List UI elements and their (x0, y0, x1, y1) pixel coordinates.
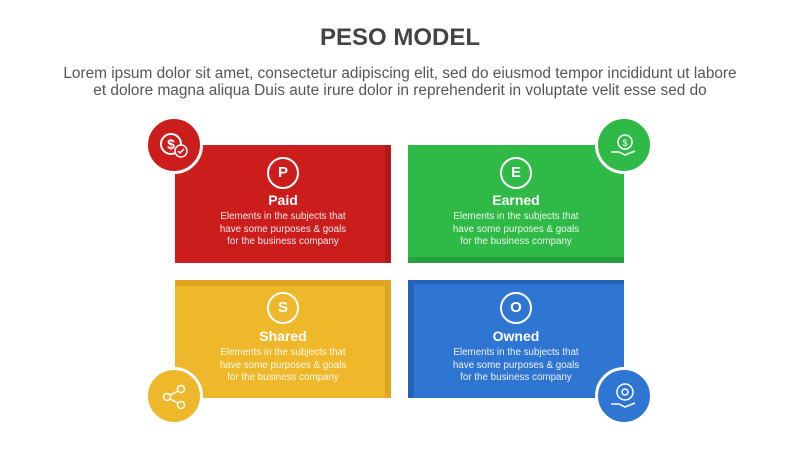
icon: dollar (145, 116, 203, 174)
icon: share (145, 367, 203, 425)
subtitle: et dolore magna aliqua Duis aute irure dolor in reprehenderit in voluptate velit esse sed do (93, 82, 707, 99)
icon: money hand (595, 116, 653, 174)
text paid: for the business company (227, 236, 339, 247)
heading earned: Earned (492, 192, 540, 208)
text shared: for the business company (227, 372, 339, 383)
letter E: E (511, 164, 521, 181)
title: PESO MODEL (320, 24, 480, 51)
text earned (453, 211, 579, 247)
text owned (453, 347, 579, 383)
heading shared: Shared (259, 328, 307, 344)
panel: paid (175, 145, 391, 263)
panel: shared (175, 280, 391, 398)
heading paid: Paid (268, 192, 298, 208)
text shared: have some purposes & goals (220, 360, 346, 370)
letter S (267, 292, 299, 324)
subtitle (63, 65, 737, 99)
icon: gear hand (595, 367, 653, 425)
icon: money hand: $ (622, 138, 628, 148)
letter P: P (278, 164, 288, 181)
text shared: Elements in the subjects that (220, 347, 346, 358)
letter O: O (510, 299, 522, 316)
text earned: Elements in the subjects that (453, 211, 579, 222)
text owned: have some purposes & goals (453, 360, 579, 370)
text paid (220, 211, 346, 247)
letter S: S (278, 299, 288, 316)
text paid: Elements in the subjects that (220, 211, 346, 222)
subtitle: Lorem ipsum dolor sit amet, consectetur adipiscing elit, sed do eiusmod tempor incididunt ut labore (63, 65, 737, 82)
text owned: Elements in the subjects that (453, 347, 579, 358)
heading owned: Owned (493, 328, 539, 344)
letter O (500, 292, 532, 324)
letter P (267, 157, 299, 189)
letter E (500, 157, 532, 189)
panel: earned (408, 145, 624, 263)
panel: owned (408, 280, 624, 398)
icon: dollar: $ (167, 136, 175, 152)
text shared (220, 347, 346, 383)
text paid: have some purposes & goals (220, 224, 346, 234)
text earned: have some purposes & goals (453, 224, 579, 234)
text earned: for the business company (460, 236, 572, 247)
text owned: for the business company (460, 372, 572, 383)
